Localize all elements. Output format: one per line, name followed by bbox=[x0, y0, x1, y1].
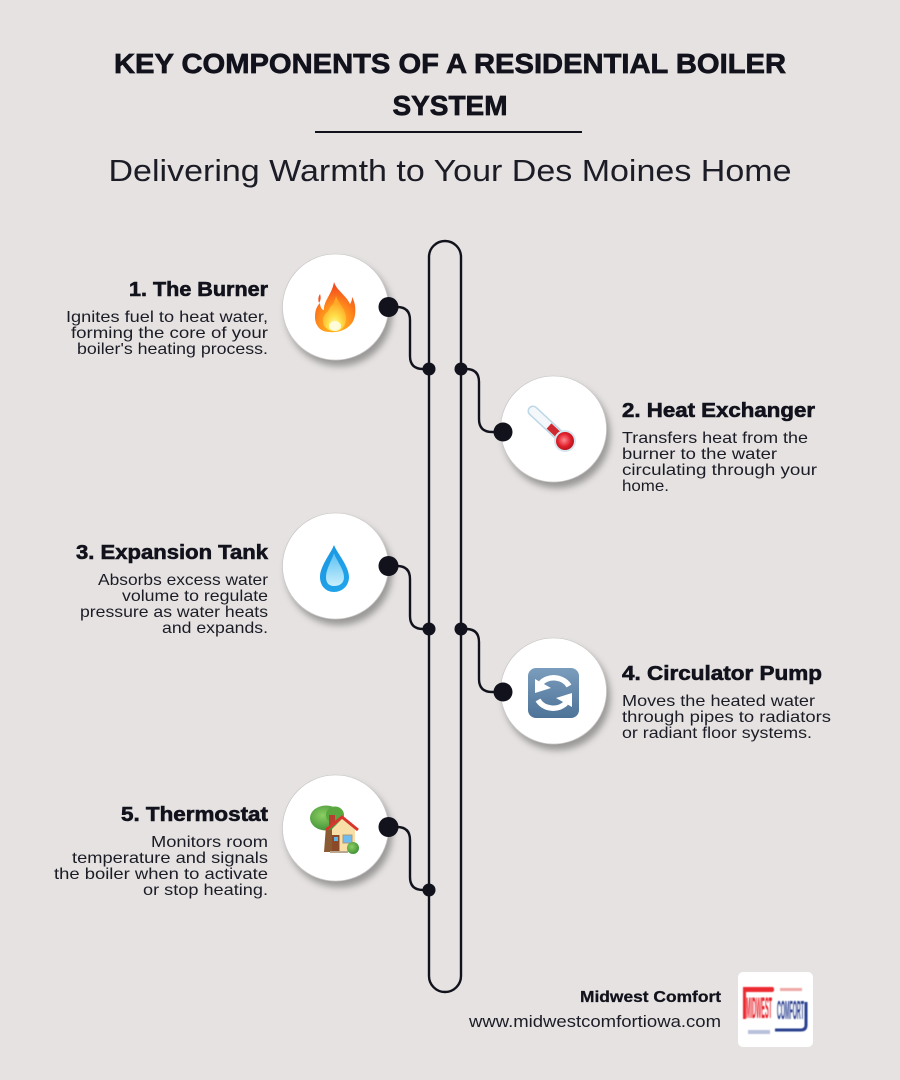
heading 2: 2. Heat Exchanger bbox=[622, 400, 815, 422]
description 4 bbox=[622, 693, 831, 742]
component 1: the burner bbox=[66, 254, 436, 376]
description 5: the boiler when to activate bbox=[54, 866, 268, 883]
title underline bbox=[315, 131, 582, 133]
junction dot 5 bbox=[422, 884, 436, 896]
icon circle 2 bbox=[500, 376, 606, 482]
logo bbox=[738, 972, 813, 1047]
description 1 bbox=[66, 309, 269, 358]
icon: water drop bbox=[320, 545, 349, 592]
junction dot 1 bbox=[422, 362, 436, 376]
description 3: pressure as water heats bbox=[80, 604, 268, 621]
icon: house with tree bbox=[310, 806, 359, 854]
description 4: through pipes to radiators bbox=[622, 709, 831, 726]
connector 5 bbox=[388, 827, 429, 890]
description 2: circulating through your bbox=[622, 462, 818, 479]
description 5: or stop heating. bbox=[143, 882, 268, 899]
description 3: volume to regulate bbox=[122, 588, 268, 605]
description 2: home. bbox=[622, 478, 669, 495]
description 2: burner to the water bbox=[622, 446, 778, 463]
component 5: thermostat bbox=[54, 775, 436, 899]
central pipe loop bbox=[429, 241, 461, 992]
icon circle 1 bbox=[282, 254, 388, 360]
junction dot 4 bbox=[454, 622, 468, 636]
description 1: forming the core of your bbox=[71, 325, 269, 342]
heading 4: 4. Circulator Pump bbox=[622, 663, 822, 685]
description 4: Moves the heated water bbox=[622, 693, 816, 710]
connector dot 5 bbox=[378, 817, 398, 837]
description 2: Transfers heat from the bbox=[622, 430, 808, 447]
icon circle 5 bbox=[282, 775, 388, 881]
icon circle 3 bbox=[282, 513, 388, 619]
junction dot 2 bbox=[454, 362, 468, 376]
connector dot 2 bbox=[494, 422, 512, 442]
description 4: or radiant floor systems. bbox=[622, 725, 812, 742]
description 1: Ignites fuel to heat water, bbox=[66, 309, 268, 326]
subtitle: Delivering Warmth to Your Des Moines Home bbox=[108, 153, 792, 188]
junction dot 3 bbox=[422, 622, 436, 636]
title: KEY COMPONENTS OF A RESIDENTIAL BOILER bbox=[114, 48, 786, 79]
heading 3: 3. Expansion Tank bbox=[76, 542, 269, 564]
text: MIDWEST bbox=[746, 992, 772, 1025]
connector dot 1 bbox=[378, 297, 398, 317]
connector 1 bbox=[388, 307, 429, 369]
icon: thermometer bbox=[533, 411, 576, 452]
description 3: and expands. bbox=[162, 620, 268, 637]
heading 1: 1. The Burner bbox=[129, 279, 268, 301]
description 1: boiler's heating process. bbox=[77, 341, 268, 358]
description 5: temperature and signals bbox=[72, 850, 268, 867]
component 4: circulator pump bbox=[454, 622, 831, 744]
title bbox=[114, 48, 786, 121]
icon: circular arrows bbox=[528, 668, 579, 718]
icon circle 4 bbox=[500, 638, 606, 744]
component 3: expansion tank bbox=[76, 513, 436, 637]
description 5 bbox=[54, 834, 268, 899]
connector 4 bbox=[461, 629, 503, 692]
component 2: heat exchanger bbox=[454, 362, 818, 495]
description 3 bbox=[80, 572, 269, 637]
icon: flame bbox=[315, 282, 355, 332]
heading 5: 5. Thermostat bbox=[121, 804, 268, 826]
connector 3 bbox=[388, 566, 429, 629]
title: SYSTEM bbox=[392, 90, 508, 121]
description 3: Absorbs excess water bbox=[98, 572, 269, 589]
connector dot 3 bbox=[378, 556, 398, 576]
footer website: www.midwestcomfortiowa.com bbox=[468, 1012, 721, 1031]
connector 2 bbox=[461, 369, 503, 432]
footer brand name: Midwest Comfort bbox=[580, 989, 722, 1006]
connector dot 4 bbox=[494, 682, 512, 702]
description 2 bbox=[622, 430, 818, 495]
description 5: Monitors room bbox=[151, 834, 268, 851]
